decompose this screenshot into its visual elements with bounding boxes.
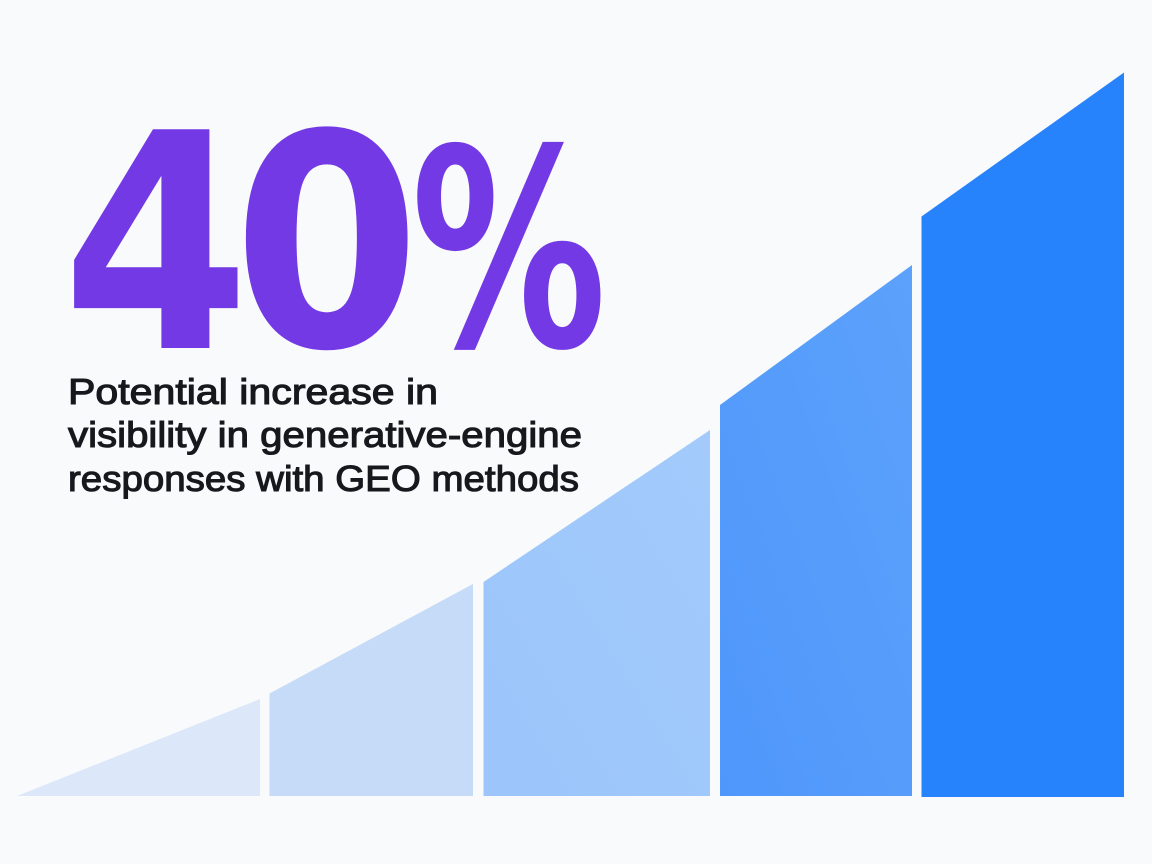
description text: Potential increase in <box>68 371 438 412</box>
bar 2 <box>270 584 473 796</box>
big statistic: 40%: % <box>411 92 607 412</box>
big statistic: 40% <box>62 70 607 419</box>
big statistic: 40%: 4 <box>62 70 250 419</box>
description text: visibility in generative-engine <box>68 414 582 455</box>
bar 3 <box>484 430 710 796</box>
bar 5 <box>922 72 1124 797</box>
bar 1 <box>17 699 260 796</box>
big statistic: 40%: 0 <box>233 71 420 416</box>
description text <box>68 371 582 499</box>
bar 4 <box>720 265 912 796</box>
description text: responses with GEO methods <box>68 458 579 499</box>
